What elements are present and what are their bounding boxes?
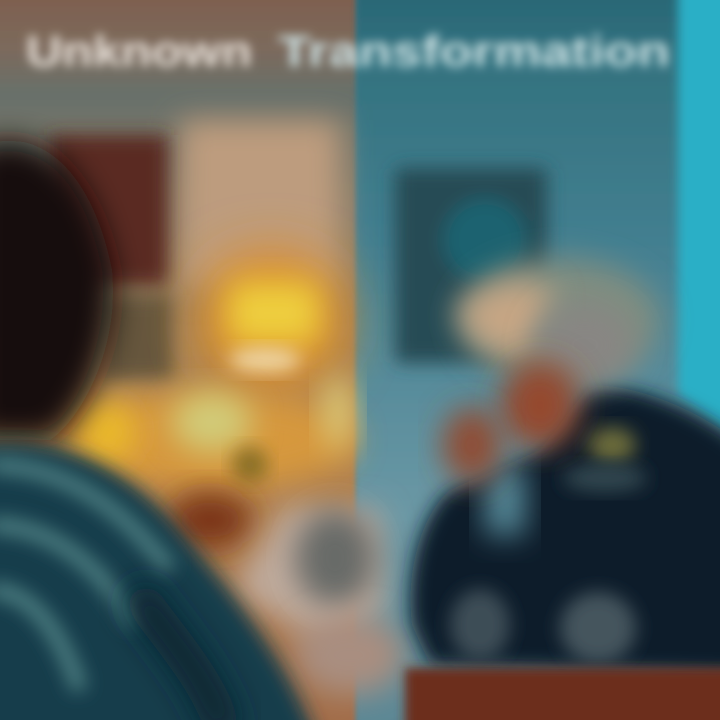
icon: glowing lamp bbox=[197, 250, 347, 390]
panel: wooden table at bottom right bbox=[405, 668, 720, 720]
panel: warm left background bbox=[0, 0, 358, 720]
person: dark-haired head at left bbox=[0, 140, 113, 440]
icon: dark picture frame on right wall bbox=[395, 168, 547, 363]
title: blurred heading text: Unknown bbox=[26, 27, 252, 76]
title: blurred heading text bbox=[26, 27, 670, 76]
person: woman's body at right bbox=[411, 385, 720, 675]
icon: pale object in the foreground bbox=[232, 505, 405, 695]
icon: red picture frame on left wall bbox=[50, 135, 173, 380]
person: woman's head and hair bbox=[442, 258, 660, 483]
icon: glowing table items bbox=[65, 374, 355, 548]
panel: teal right background bbox=[356, 0, 720, 720]
panel: pale wall behind lamp bbox=[180, 120, 340, 290]
panel: bright cyan strip bbox=[678, 0, 720, 440]
person: striped sweater at left bbox=[0, 442, 320, 720]
title: blurred heading text: Transformation bbox=[278, 27, 670, 76]
